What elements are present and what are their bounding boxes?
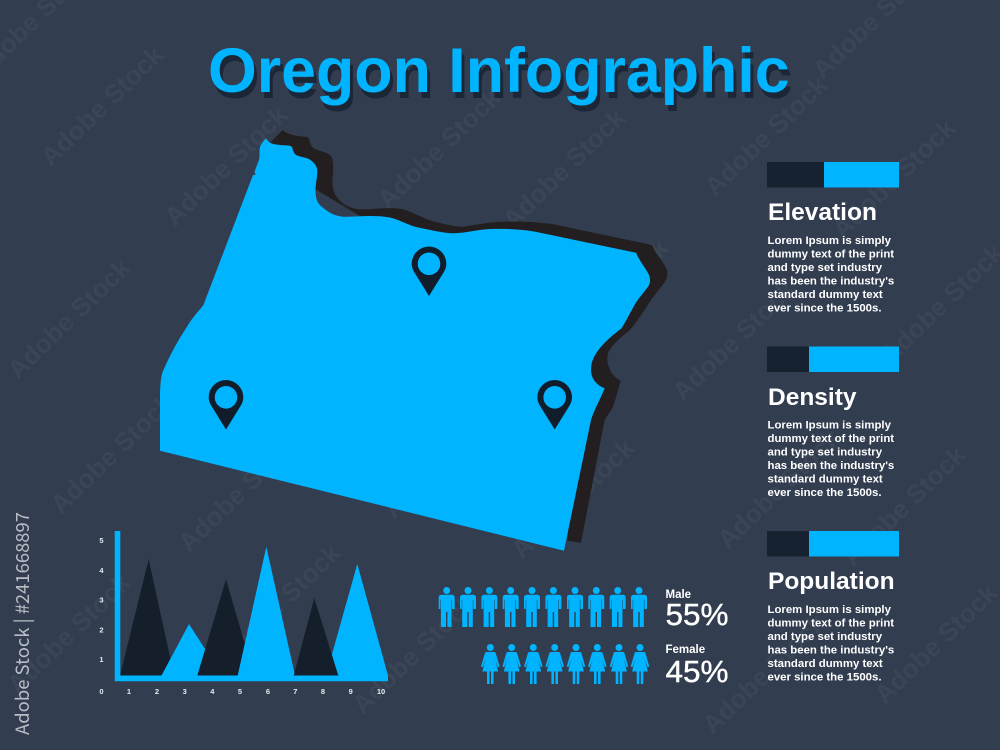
text: Adobe Stock (836, 439, 972, 572)
elevation text: dummy text of the print (768, 248, 894, 260)
x axis labels (99, 687, 385, 696)
title: Oregon Infographic (211, 42, 793, 112)
text: Adobe Stock (346, 587, 482, 720)
population text: standard dummy text (768, 658, 883, 670)
density heading: Density (768, 384, 857, 411)
text: Adobe Stock (34, 39, 170, 172)
text: Adobe Stock (158, 99, 294, 232)
population text: dummy text of the print (768, 618, 894, 630)
x axis labels: 3 (183, 687, 187, 696)
density text: and type set industry (768, 446, 883, 458)
population text: Lorem Ipsum is simply (768, 604, 892, 616)
text: Adobe Stock (868, 577, 1000, 710)
y axis labels (99, 536, 104, 664)
map: Oregon with pins (160, 130, 667, 551)
text: Adobe Stock (696, 607, 832, 740)
density text: has been the industry's (768, 460, 894, 472)
icon: map pin north (412, 246, 446, 296)
text: Adobe Stock (826, 112, 962, 245)
elevation text: and type set industry (768, 262, 883, 274)
elevation text: ever since the 1500s. (768, 302, 881, 314)
blue peak 3 (238, 547, 295, 676)
x axis labels: 4 (210, 687, 215, 696)
elevation text: Lorem Ipsum is simply (768, 235, 892, 247)
x axis labels: 0 (99, 687, 104, 696)
density bar (767, 346, 899, 372)
y axis labels: 4 (99, 566, 104, 575)
y axis labels: 1 (99, 655, 104, 664)
density text: standard dummy text (768, 474, 883, 486)
density text: dummy text of the print (768, 433, 894, 445)
dark peak 3 (294, 598, 338, 676)
text: Adobe Stock (539, 232, 675, 365)
elevation text: has been the industry's (768, 276, 894, 288)
panel: population (767, 531, 899, 684)
female statistic: Female (666, 644, 705, 656)
x axis labels: 2 (155, 687, 159, 696)
x axis labels: 5 (238, 687, 242, 696)
text: Adobe Stock (333, 264, 469, 397)
text: Adobe Stock (377, 392, 513, 525)
male statistic: 55% (666, 597, 728, 632)
x axis labels: 8 (321, 687, 325, 696)
title: Oregon Infographic (208, 36, 790, 106)
density text: ever since the 1500s. (768, 487, 881, 499)
chart: triangle peaks (99, 531, 388, 696)
population text: has been the industry's (768, 644, 894, 656)
icon: map pin east (537, 380, 572, 430)
map shadow (270, 130, 667, 543)
text: Adobe Stock (666, 274, 802, 407)
panel: elevation (767, 162, 899, 314)
x axis labels: 1 (127, 687, 131, 696)
stock id side text: Adobe Stock | #241668897 (9, 512, 35, 735)
density text: Lorem Ipsum is simply (768, 420, 892, 432)
blue peak 4 (326, 564, 388, 676)
male pictogram row (439, 587, 647, 627)
text: Adobe Stock (44, 387, 180, 520)
icon: map pin west (209, 380, 243, 430)
dark peak 1 (120, 559, 174, 676)
x axis labels: 9 (349, 687, 353, 696)
dark peak 2 (197, 579, 254, 676)
text: Adobe Stock (698, 69, 834, 202)
blue peak 2 (162, 624, 222, 676)
text: Adobe Stock (172, 425, 308, 558)
y axis labels: 5 (99, 536, 104, 545)
y axis labels: 3 (99, 596, 104, 604)
y axis labels: 2 (99, 625, 104, 634)
chart axes (115, 531, 388, 681)
female statistic: 45% (666, 654, 728, 689)
text: Adobe Stock (1, 567, 137, 700)
text: Adobe Stock (711, 422, 847, 555)
text: Adobe Stock (207, 222, 343, 355)
population bar (767, 531, 899, 556)
population text: ever since the 1500s. (768, 672, 881, 684)
elevation heading: Elevation (768, 199, 877, 226)
text: Adobe Stock (496, 102, 632, 235)
text: Adobe Stock (371, 82, 507, 215)
population heading: Population (768, 568, 895, 595)
map shape (160, 138, 650, 551)
text: Adobe Stock (211, 537, 347, 670)
text: Adobe Stock (1, 252, 137, 385)
female pictogram row (481, 644, 649, 684)
panel: density (767, 346, 899, 499)
elevation bar (767, 162, 899, 188)
population text: and type set industry (768, 631, 883, 643)
elevation text: standard dummy text (768, 289, 883, 301)
text: Adobe Stock (505, 432, 641, 565)
x axis labels: 7 (293, 687, 297, 696)
male statistic: Male (666, 589, 691, 601)
x axis labels: 6 (266, 687, 270, 696)
x axis labels: 10 (377, 687, 385, 696)
